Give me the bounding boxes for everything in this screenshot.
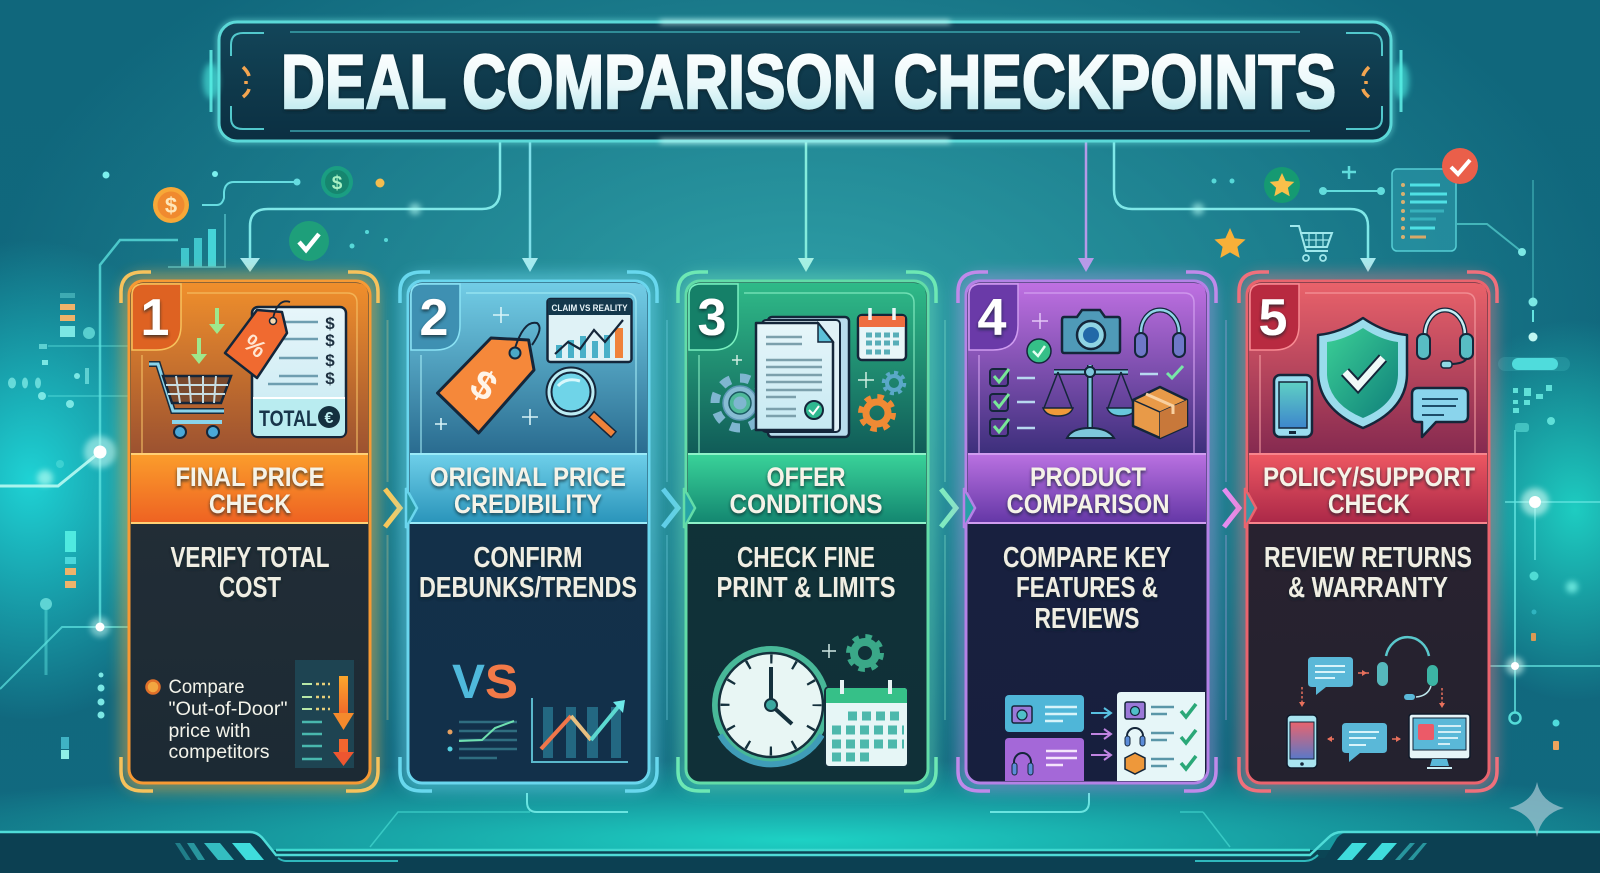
- icon: dollar price tag: [438, 323, 540, 433]
- panel: card 2 original price credibility: 2: [420, 289, 448, 347]
- icon: clock: [712, 646, 830, 764]
- comparison: arrows: [1091, 708, 1111, 760]
- icon: dollar price tag: $: [463, 361, 504, 410]
- text: check fine print and limits: CHECK FINE: [737, 542, 875, 574]
- icon: shopping cart with arrows: [149, 308, 231, 438]
- chart: claim vs reality: [548, 299, 632, 362]
- text: check fine print and limits: PRINT & LIMITS: [716, 572, 896, 604]
- panel: card 4 product comparison: [958, 272, 1216, 791]
- icon: receipt with total: $: [325, 314, 335, 333]
- panel: card 2 original price credibility: [400, 272, 657, 791]
- icon: calendar: [858, 308, 906, 360]
- panel: card 3 offer conditions: [678, 272, 936, 791]
- heading: policy support check: [1263, 462, 1475, 519]
- text: verify total cost: VERIFY TOTAL: [170, 542, 330, 574]
- icons: floating coins and bars left of top: $: [165, 193, 177, 218]
- icon: gear and sparkle: [822, 637, 881, 669]
- icons: floating coins and bars left of top: [102, 166, 388, 267]
- panel: card 5 policy and support check: 5: [1259, 289, 1287, 347]
- icon: smartphone: [1274, 375, 1312, 437]
- heading: final price check: FINAL PRICE: [176, 462, 324, 492]
- chart: claim vs reality: CLAIM VS REALITY: [552, 303, 628, 314]
- icons: floating coins and bars left of top: $: [332, 173, 343, 194]
- label: vs: VS: [452, 656, 518, 709]
- text: review returns and warranty: [1264, 542, 1472, 604]
- icon: large gear: [715, 378, 765, 428]
- heading: product comparison: [1006, 462, 1170, 519]
- icon: receipt with total: TOTAL: [259, 406, 317, 431]
- note: compare out-of-door price: Compare: [168, 677, 244, 698]
- diagram: support flow: [1287, 637, 1470, 768]
- chart: small trend list: [448, 721, 517, 758]
- icon: headphones: [1135, 310, 1185, 357]
- icon: document stack: [756, 317, 849, 437]
- note: compare out-of-door price: competitors: [168, 742, 270, 763]
- heading: product comparison: COMPARISON: [1006, 489, 1170, 519]
- panel: card 4 product comparison: 4: [978, 289, 1007, 347]
- heading: original price credibility: [430, 462, 626, 519]
- icons: floating star, cart and checklist right of top: [1212, 148, 1478, 261]
- heading: product comparison: PRODUCT: [1030, 462, 1146, 492]
- note: compare out-of-door price: [146, 677, 288, 763]
- text: compare key features and reviews: FEATURES &: [1016, 572, 1158, 604]
- icon: checklist: [990, 366, 1183, 436]
- panel: card 3 offer conditions: 3: [698, 289, 726, 347]
- note: compare out-of-door price: "Out-of-Door": [168, 699, 288, 720]
- panel: card 1 final price check: 1: [141, 289, 169, 347]
- title text: DEAL COMPARISON CHECKPOINTS: [281, 40, 1336, 125]
- icon: magnifying glass: [549, 370, 614, 435]
- icon: headset: [1417, 310, 1473, 368]
- comparison: checklist panel: [1117, 692, 1205, 781]
- text: review returns and warranty: REVIEW RETURNS: [1264, 542, 1472, 574]
- icon: small gears: [732, 355, 904, 429]
- icon: sparkles: [435, 307, 538, 430]
- icon: cardboard box: [1133, 387, 1187, 438]
- bottom tech strip: [0, 793, 1600, 873]
- icon: receipt with total: €: [325, 410, 334, 427]
- icon: camera: [1062, 310, 1120, 353]
- icon: receipt with total: $: [325, 369, 335, 388]
- text: compare key features and reviews: COMPARE KEY: [1003, 542, 1171, 574]
- icon: percent price tag: %: [238, 329, 271, 364]
- text: verify total cost: [170, 542, 330, 604]
- heading: final price check: [176, 462, 324, 519]
- note: compare out-of-door price: price with: [168, 721, 250, 742]
- text: compare key features and reviews: [1003, 542, 1171, 635]
- text: review returns and warranty: & WARRANTY: [1288, 572, 1448, 604]
- heading: final price check: CHECK: [209, 489, 291, 519]
- panel: card 1 final price check: [121, 272, 378, 791]
- heading: original price credibility: ORIGINAL PRICE: [430, 462, 626, 492]
- heading: offer conditions: CONDITIONS: [730, 489, 882, 519]
- text: confirm debunks/trends: CONFIRM: [474, 542, 582, 574]
- text: check fine print and limits: [716, 542, 896, 604]
- chart: price list with down arrows: [295, 660, 354, 768]
- heading: policy support check: POLICY/SUPPORT: [1263, 462, 1475, 492]
- text: confirm debunks/trends: [419, 542, 637, 604]
- icon: percent price tag: [225, 301, 290, 378]
- text: compare key features and reviews: REVIEWS: [1034, 603, 1140, 635]
- text: confirm debunks/trends: DEBUNKS/TRENDS: [419, 572, 637, 604]
- panel: card 5 policy and support check: [1239, 272, 1497, 791]
- icon: wall calendar: [825, 680, 908, 767]
- icon: receipt with total: [252, 307, 346, 437]
- background circuit decoration left: [0, 240, 178, 759]
- background circuit decoration right: [1457, 180, 1600, 750]
- icon: receipt with total: $: [325, 331, 335, 350]
- flow chevrons and faint dividers between cards: [385, 320, 1239, 720]
- icon: green check and sparkle: [1027, 313, 1051, 363]
- chart: rising line chart: [532, 698, 628, 762]
- icon: balance scale: [1043, 365, 1136, 438]
- connector arrows from title to cards: [240, 141, 1376, 272]
- watermark sparkle: [1509, 782, 1564, 837]
- text: verify total cost: COST: [219, 572, 281, 604]
- heading: original price credibility: CREDIBILITY: [454, 489, 602, 519]
- heading: offer conditions: OFFER: [766, 462, 846, 492]
- comparison: product source cards: [1005, 695, 1084, 781]
- heading: policy support check: CHECK: [1328, 489, 1410, 519]
- icon: chat bubble: [1412, 388, 1468, 437]
- icon: receipt with total: $: [325, 351, 335, 370]
- title banner: [203, 22, 1409, 141]
- icon: shield with check: [1318, 318, 1407, 428]
- heading: offer conditions: [730, 462, 882, 519]
